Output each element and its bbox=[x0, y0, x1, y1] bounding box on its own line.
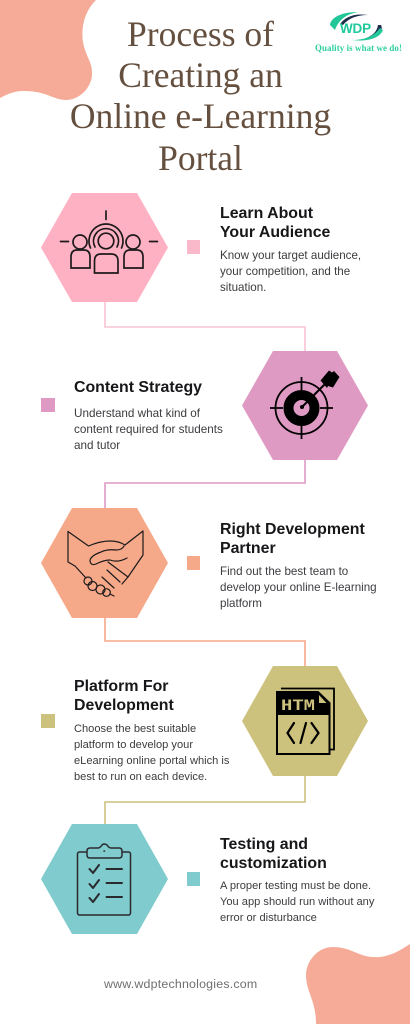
text: step 3 bbox=[220, 521, 377, 610]
text: step 4 bbox=[74, 678, 229, 783]
text: step 1: Know your target audience, bbox=[220, 249, 361, 262]
text: step 4: platform to develop your bbox=[74, 739, 193, 751]
text: step 3: Find out the best team to bbox=[220, 565, 348, 578]
marker: step 5 bbox=[187, 872, 200, 886]
title: Creating an bbox=[118, 55, 283, 95]
text: step 4: best to run on each device. bbox=[74, 771, 207, 783]
blob: bottom right bbox=[306, 944, 410, 1024]
hexagon: step 2 with target icon bbox=[242, 351, 368, 460]
marker: step 4 bbox=[41, 714, 55, 728]
title: Portal bbox=[158, 138, 243, 178]
text: step 4: Choose the best suitable bbox=[74, 723, 196, 735]
marker: step 2 bbox=[41, 398, 55, 412]
text: step 5: You app should run without any bbox=[220, 896, 374, 908]
icon: WDP logo swooshes bbox=[330, 12, 383, 41]
connector: step 3 to 4 bbox=[105, 618, 305, 666]
text: step 3: platform bbox=[220, 597, 262, 610]
text: step 5 bbox=[220, 836, 374, 924]
text: step 1: Learn About bbox=[220, 205, 313, 222]
text: step 3: develop your online E-learning bbox=[220, 581, 377, 594]
text: step 2 bbox=[74, 379, 223, 452]
logo tagline: Quality is what we do! bbox=[315, 43, 402, 53]
connector: step 1 to 2 bbox=[105, 302, 305, 351]
text: step 5: Testing and bbox=[220, 836, 308, 853]
hexagon: step 5 with checklist icon bbox=[41, 824, 168, 934]
text: step 4: Platform For bbox=[74, 678, 168, 695]
text: step 1: your competition, and the bbox=[220, 265, 350, 278]
text: step 2: content required for students bbox=[74, 423, 223, 436]
text: step 1: situation. bbox=[220, 281, 266, 294]
text: step 4: Development bbox=[74, 697, 174, 714]
hexagon: step 4 with HTML file icon bbox=[242, 666, 368, 776]
connector: step 4 to 5 bbox=[105, 776, 305, 824]
hexagon: step 4 with HTML file icon: HTM bbox=[281, 697, 315, 715]
text: step 4: eLearning online portal which is bbox=[74, 755, 229, 767]
hexagon: step 1 with audience icon bbox=[41, 193, 168, 302]
text: step 2: Understand what kind of bbox=[74, 407, 200, 420]
title: Process of bbox=[127, 14, 274, 54]
marker: step 1 bbox=[187, 240, 200, 254]
hexagon: step 3 with handshake icon bbox=[41, 508, 168, 618]
title bbox=[70, 14, 331, 178]
text: step 2: and tutor bbox=[74, 439, 120, 452]
blob: top left bbox=[0, 0, 96, 100]
text: step 1 bbox=[220, 205, 361, 294]
text: step 2: Content Strategy bbox=[74, 379, 202, 396]
text: step 3: Partner bbox=[220, 540, 276, 557]
marker: step 3 bbox=[187, 556, 200, 570]
connector: step 2 to 3 bbox=[105, 460, 305, 508]
title: Online e-Learning bbox=[70, 96, 331, 136]
text: step 5: A proper testing must be done. bbox=[220, 880, 371, 892]
text: step 5: customization bbox=[220, 855, 327, 872]
text: step 3: Right Development bbox=[220, 521, 365, 538]
text: step 1: Your Audience bbox=[220, 224, 330, 241]
website footer: www.wdptechnologies.com bbox=[104, 977, 257, 991]
text: step 5: error or disturbance bbox=[220, 912, 317, 924]
logo wordmark: WDP bbox=[340, 21, 371, 36]
